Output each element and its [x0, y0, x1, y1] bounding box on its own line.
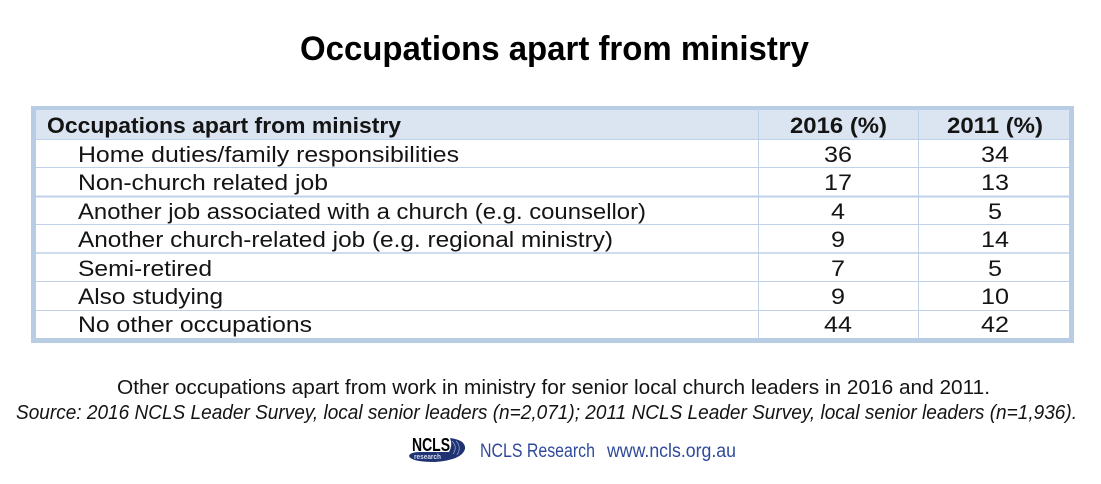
- row: another job with church: 5: [988, 199, 1002, 224]
- row: another church-related job: Another church-related job (e.g. regional ministry): [78, 227, 613, 252]
- row: no other occupations: 42: [981, 312, 1009, 337]
- source note: Source: 2016 NCLS Leader Survey, local senior leaders (n=2,071); 2011 NCLS Leader Survey, local senior leaders (n=1,936).: [16, 402, 1077, 424]
- row: another job with church: 4: [831, 199, 845, 224]
- header row: 2016 (%): [790, 113, 887, 138]
- header row: [47, 113, 1043, 138]
- row: also studying: 9: [831, 284, 845, 309]
- row: also studying: 10: [981, 284, 1009, 309]
- row: also studying: [78, 284, 1009, 309]
- header row: Occupations apart from ministry: [47, 113, 402, 138]
- row: no other occupations: [78, 312, 1009, 337]
- row: non-church job: [78, 170, 1009, 195]
- header row: 2011 (%): [947, 113, 1043, 138]
- row: semi-retired: 7: [831, 256, 845, 281]
- row: another church-related job: 14: [981, 227, 1009, 252]
- table body background: [36, 110, 1069, 338]
- icon: NCLS logo: [409, 435, 465, 462]
- caption: Other occupations apart from work in ministry for senior local church leaders in 2016 and 2011.: [117, 377, 990, 399]
- row: no other occupations: No other occupations: [78, 312, 312, 337]
- row: non-church job: 17: [824, 170, 852, 195]
- footer website: www.ncls.org.au: [606, 441, 736, 462]
- row: semi-retired: [78, 256, 1002, 281]
- row: semi-retired: 5: [988, 256, 1002, 281]
- row: also studying: Also studying: [78, 284, 223, 309]
- table: [31, 106, 1074, 343]
- row: another job with church: [78, 199, 1002, 224]
- table header background: [36, 110, 1069, 139]
- row: another job with church: Another job associated with a church (e.g. counsellor): [78, 199, 646, 224]
- table outer border: [31, 106, 1074, 343]
- row: no other occupations: 44: [824, 312, 852, 337]
- footer organisation name: NCLS Research: [480, 441, 595, 462]
- row: another church-related job: 9: [831, 227, 845, 252]
- icon: NCLS logo: NCLS: [412, 435, 450, 455]
- icon: NCLS logo: research: [414, 454, 441, 461]
- row: home duties: [78, 142, 1009, 167]
- row: home duties: 36: [824, 142, 852, 167]
- table grid lines: [36, 108, 1069, 338]
- row: home duties: 34: [981, 142, 1009, 167]
- row: another church-related job: [78, 227, 1009, 252]
- title: Occupations apart from ministry: [300, 30, 809, 68]
- row: semi-retired: Semi-retired: [78, 256, 212, 281]
- row: non-church job: Non-church related job: [78, 170, 328, 195]
- row: non-church job: 13: [981, 170, 1009, 195]
- row: home duties: Home duties/family responsibilities: [78, 142, 459, 167]
